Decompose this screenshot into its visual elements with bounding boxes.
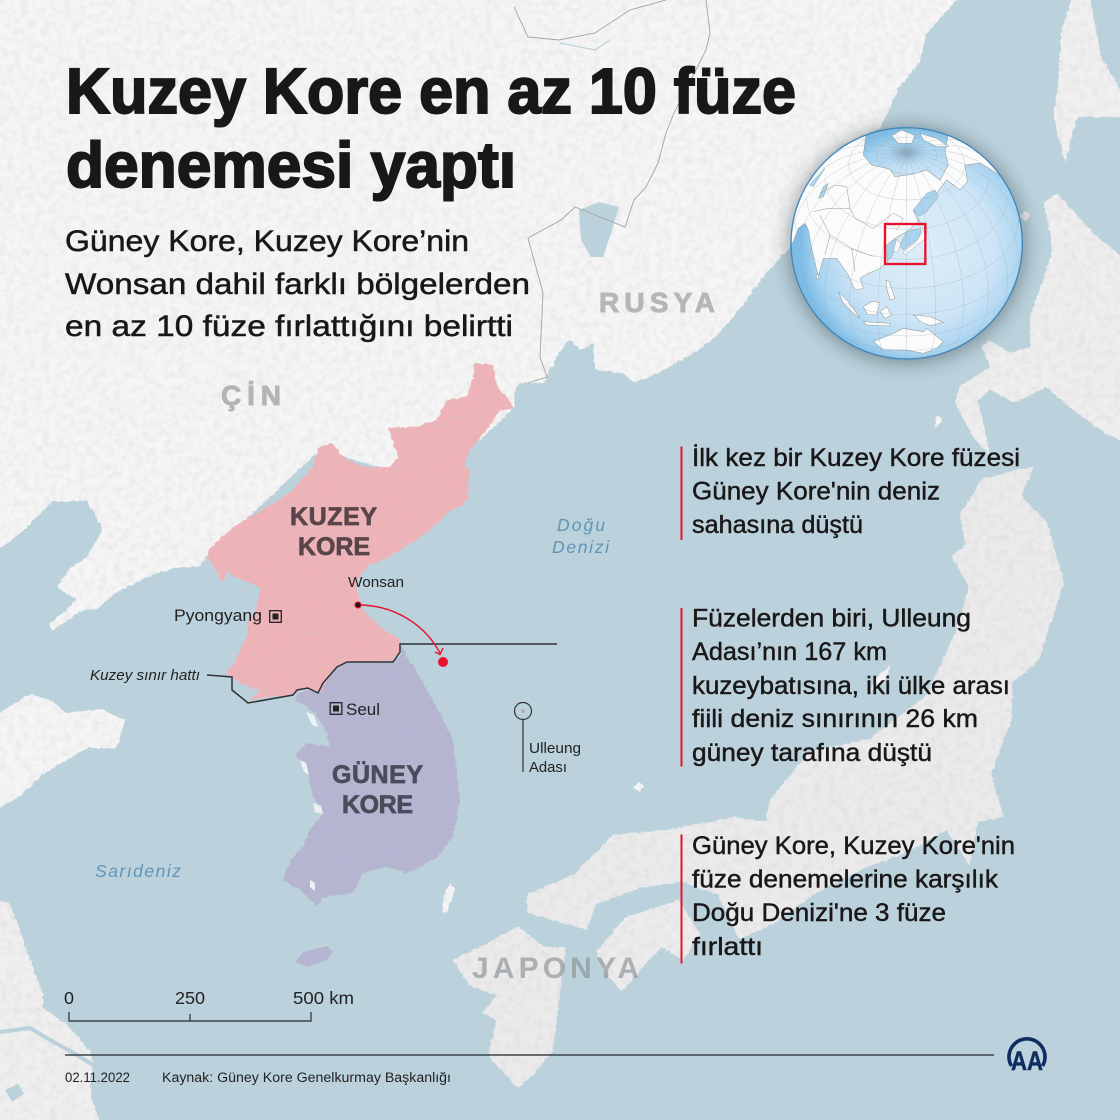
sea label: Dogu Denizi: Doğu [557, 515, 605, 535]
lakes and rivers [0, 0, 710, 1102]
text block 1: Güney Kore'nin deniz [692, 478, 940, 506]
globe: limb outline [791, 128, 1022, 359]
logo: Anadolu Agency: AA [1011, 1046, 1043, 1076]
date: 02.11.2022 [65, 1070, 130, 1085]
source: Kaynak: Güney Kore Genelkurmay Başkanlığı [162, 1070, 451, 1085]
subtitle [65, 225, 530, 343]
globe shadow [788, 126, 1026, 364]
text block 3: Doğu Denizi'ne 3 füze [692, 899, 946, 927]
text block 3: füze denemelerine karşılık [692, 866, 999, 894]
scale bar: 500 km [293, 988, 354, 1008]
Ulleung island marker [514, 702, 581, 776]
text block 2: kuzeybatısına, iki ülke arası [692, 672, 1010, 700]
launch point Wonsan [355, 602, 361, 608]
subtitle: Wonsan dahil farklı bölgelerden [65, 268, 530, 301]
title: Kuzey Kore en az 10 füze [66, 55, 796, 127]
text block 2: Füzelerden biri, Ulleung [692, 604, 971, 632]
land: China and Russia [0, 0, 962, 631]
globe: Japan and Korea [893, 218, 926, 255]
scale bar: 0 [64, 988, 74, 1008]
city: Pyongyang: Pyongyang [174, 607, 262, 625]
country label: Rusya: RUSYA [599, 287, 715, 318]
text block 3: fırlattı [692, 933, 763, 961]
sea label: Sarideniz: Sarıdeniz [95, 861, 181, 881]
text block 3: Güney Kore, Kuzey Kore'nin [692, 832, 1015, 860]
country label: Kuzey Kore [290, 503, 377, 561]
text block 1: sahasına düştü [692, 511, 863, 539]
Ulleung island marker: Adası [529, 760, 567, 776]
impact point [438, 657, 448, 667]
land: Sakhalin north [1054, 0, 1120, 163]
globe: borders [813, 185, 903, 272]
land: Shandong peninsula [0, 694, 125, 811]
globe: Arctic pole shading [891, 144, 923, 164]
globe: graticule [791, 128, 1022, 359]
country label: Cin: ÇİN [221, 380, 281, 411]
Jeju island [295, 946, 333, 967]
scale bar: 250 [175, 988, 205, 1008]
land: Shikoku [596, 900, 700, 991]
subtitle: Güney Kore, Kuzey Kore’nin [65, 225, 469, 258]
text block 3 [680, 832, 1015, 964]
South Korea [283, 645, 460, 907]
text block 2: fiili deniz sınırının 26 km [692, 705, 978, 733]
title: denemesi yaptı [66, 129, 516, 201]
North Korea [208, 363, 513, 700]
Ulleung island marker: Ulleung [529, 741, 581, 757]
footer rule [65, 1054, 994, 1056]
city: Seul: Seul [346, 700, 380, 719]
label: Kuzey sinir hatti: Kuzey sınır hattı [90, 668, 200, 684]
subtitle: en az 10 füze fırlattığını belirtti [65, 310, 513, 343]
country label: Kuzey Kore: KORE [298, 533, 370, 561]
land: small islands [442, 211, 1030, 913]
text block 2: güney tarafına düştü [692, 739, 932, 767]
missile trajectory arrow [358, 605, 443, 654]
lake Khanka [579, 202, 619, 257]
land: east China coast [0, 898, 102, 1120]
land: Sakhalin south and Hokkaido [955, 193, 1120, 455]
logo: Anadolu Agency [1009, 1039, 1045, 1076]
sea label: Dogu Denizi [552, 515, 610, 557]
northern limit line and sea border [207, 644, 557, 703]
sea label: Dogu Denizi: Denizi [552, 537, 610, 557]
globe: continents [792, 130, 999, 354]
Korean west coast white flats [300, 712, 323, 891]
locator globe [780, 125, 1022, 359]
country label: Guney Kore [332, 760, 423, 819]
country label: Japonya: JAPONYA [472, 952, 639, 985]
text block 1: İlk kez bir Kuzey Kore füzesi [692, 443, 1020, 472]
country label: Guney Kore: GÜNEY [332, 760, 423, 789]
text block 2 [680, 604, 1010, 767]
scale bar [64, 988, 354, 1021]
globe: inner seas [809, 168, 938, 261]
land: Kyushu [453, 926, 566, 1088]
city: Wonsan: Wonsan [348, 574, 404, 591]
title [66, 55, 796, 201]
land: Honshu [527, 466, 1064, 939]
country label: Kuzey Kore: KUZEY [290, 503, 377, 531]
text block 2: Adası’nın 167 km [692, 638, 887, 666]
text block 1 [680, 443, 1020, 540]
globe: red locator box [885, 224, 925, 264]
city: Seul [330, 700, 380, 719]
country label: Guney Kore: KORE [342, 791, 413, 819]
